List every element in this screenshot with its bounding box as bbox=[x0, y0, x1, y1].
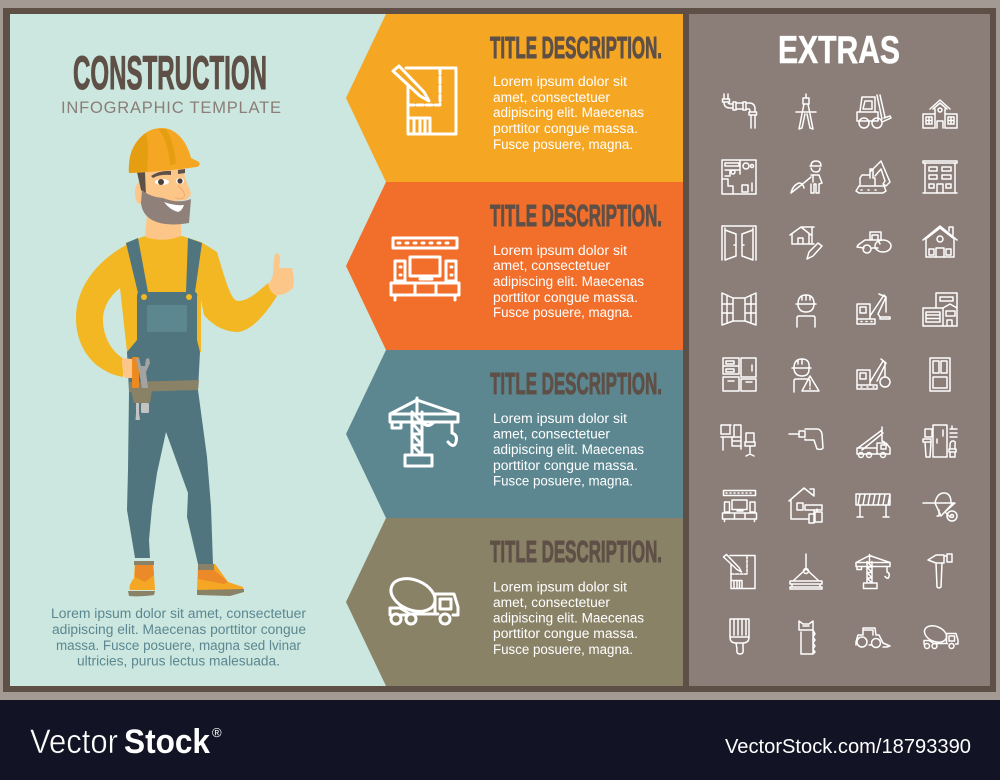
step 4 chevron bbox=[346, 518, 683, 686]
icon: hammer bbox=[928, 554, 952, 588]
icon: kitchen cabinets bbox=[723, 358, 756, 391]
icon: bathroom bbox=[923, 425, 957, 457]
step 1 text: Fusce posuere, magna. bbox=[493, 137, 633, 153]
icon: worker with shovel bbox=[791, 161, 822, 193]
footer logo: Stock bbox=[124, 723, 210, 761]
icon: paint brush bbox=[730, 619, 749, 654]
icon: office desk bbox=[721, 425, 755, 456]
step 3 text: adipiscing elit. Maecenas bbox=[493, 442, 644, 458]
step 3 text: amet, consectetuer bbox=[493, 426, 610, 442]
bib pocket bbox=[147, 305, 187, 332]
hard hat shading bbox=[129, 129, 176, 173]
subtitle: INFOGRAPHIC TEMPLATE bbox=[61, 99, 281, 117]
worker overalls bbox=[126, 238, 213, 564]
eyebrows bbox=[151, 169, 185, 178]
step 2 text: amet, consectetuer bbox=[493, 258, 610, 274]
icon: window bbox=[722, 293, 756, 325]
step 1 chevron bbox=[346, 14, 683, 182]
icon: compass bbox=[796, 94, 816, 129]
icon: door bbox=[930, 358, 950, 391]
thumbs up hand bbox=[268, 253, 294, 295]
icon: double door bbox=[722, 226, 756, 260]
icon: hoisted girder bbox=[790, 554, 822, 589]
step 2 heading: TITLE DESCRIPTION. bbox=[490, 199, 662, 233]
panel: step 4 bbox=[346, 518, 683, 686]
step 4 heading: TITLE DESCRIPTION. bbox=[490, 535, 662, 569]
icon: house with paint roller bbox=[789, 488, 822, 523]
icon: office buildings bbox=[923, 293, 957, 326]
icon: apartment building bbox=[923, 161, 957, 193]
panel: step 1 bbox=[346, 14, 683, 182]
footer logo: ® bbox=[212, 725, 222, 740]
extras heading: EXTRAS bbox=[778, 29, 900, 72]
ear bbox=[135, 182, 145, 204]
icon: tower crane bbox=[856, 554, 890, 588]
panel: step 3 bbox=[346, 350, 683, 518]
step 3 text bbox=[493, 411, 644, 490]
step 1 icon: blueprint and pencil bbox=[393, 66, 456, 134]
step 1 text bbox=[493, 74, 644, 153]
icon: hand saw bbox=[799, 621, 815, 654]
step 3 text: porttitor congue massa. bbox=[493, 458, 638, 474]
bib buttons bbox=[141, 294, 192, 300]
icon: wheelbarrow bbox=[923, 493, 957, 521]
icon: excavator bbox=[856, 161, 890, 193]
face bbox=[143, 168, 191, 204]
tool pouch bbox=[131, 390, 152, 403]
step 4 text: Lorem ipsum dolor sit bbox=[493, 580, 627, 596]
illustration: construction worker bbox=[76, 128, 294, 596]
step 2 text: Fusce posuere, magna. bbox=[493, 305, 633, 321]
footer logo: Vector bbox=[30, 723, 118, 761]
tools bbox=[132, 357, 150, 420]
icon grid: extras bbox=[721, 94, 958, 654]
step 2 text bbox=[493, 243, 644, 321]
icon: road roller bbox=[857, 232, 891, 253]
icon: house bbox=[923, 226, 957, 257]
step 4 text: adipiscing elit. Maecenas bbox=[493, 610, 644, 626]
step 3 text: Fusce posuere, magna. bbox=[493, 474, 633, 490]
step 4 text: amet, consectetuer bbox=[493, 595, 610, 611]
hand at belt bbox=[122, 358, 132, 378]
nose bbox=[175, 186, 184, 199]
step 3 text: Lorem ipsum dolor sit bbox=[493, 411, 627, 427]
left text block: adipiscing elit. Maecenas porttitor congue bbox=[52, 622, 306, 638]
left text block: massa. Fusce posuere, magna sed lvinar bbox=[56, 638, 301, 654]
footer url: VectorStock.com/18793390 bbox=[725, 736, 971, 758]
footer bar bbox=[0, 700, 1000, 780]
step 3 icon: tower crane bbox=[390, 398, 458, 466]
panel: step 2 bbox=[346, 182, 683, 350]
panel: left background bbox=[10, 14, 683, 686]
step 4 text: porttitor congue massa. bbox=[493, 626, 638, 642]
worker neck bbox=[145, 215, 181, 240]
panel: extras background bbox=[689, 14, 990, 686]
icon: worker with warning sign bbox=[792, 359, 819, 392]
icon: road barrier bbox=[856, 494, 890, 517]
icon: tv console bbox=[722, 490, 756, 522]
left text block bbox=[51, 606, 306, 670]
icon: mobile crane bbox=[857, 427, 890, 458]
step 2 chevron bbox=[346, 182, 683, 350]
step 3 chevron bbox=[346, 350, 683, 518]
hard hat bbox=[129, 128, 200, 173]
icon: pipe bbox=[722, 94, 756, 128]
icon: school bbox=[923, 100, 957, 128]
hair bbox=[137, 172, 146, 196]
worker arm left bbox=[76, 243, 140, 377]
icon: house plan with pencil bbox=[790, 227, 822, 259]
left text block: ultricies, purus lectus malesuada. bbox=[77, 654, 280, 670]
title: CONSTRUCTION bbox=[73, 46, 267, 99]
icon: forklift bbox=[857, 95, 891, 128]
footer logo bbox=[30, 723, 222, 761]
step 1 heading: TITLE DESCRIPTION. bbox=[490, 31, 662, 65]
step 4 text bbox=[493, 580, 644, 658]
step 2 icon: tv console bbox=[391, 238, 459, 300]
icon: floor plan bbox=[722, 160, 756, 194]
step 2 text: porttitor congue massa. bbox=[493, 290, 638, 306]
step 2 text: Lorem ipsum dolor sit bbox=[493, 243, 627, 259]
icon: bulldozer bbox=[856, 628, 890, 648]
left boot bbox=[128, 561, 155, 596]
step 1 text: adipiscing elit. Maecenas bbox=[493, 105, 644, 121]
icon: wrecking crane bbox=[857, 359, 890, 389]
worker torso and right arm bbox=[120, 236, 277, 352]
smile bbox=[164, 202, 184, 212]
right boot bbox=[197, 564, 244, 596]
belt bbox=[129, 380, 199, 392]
icon: worker bbox=[796, 295, 816, 327]
step 1 text: Lorem ipsum dolor sit bbox=[493, 74, 627, 90]
step 4 icon: cement mixer bbox=[386, 572, 458, 624]
eyes bbox=[155, 178, 184, 185]
icon: crawler crane bbox=[857, 294, 890, 324]
icon: cement mixer bbox=[922, 623, 958, 648]
step 3 heading: TITLE DESCRIPTION. bbox=[490, 367, 662, 401]
icon: drill bbox=[789, 429, 823, 449]
step 1 text: porttitor congue massa. bbox=[493, 121, 638, 137]
step 2 text: adipiscing elit. Maecenas bbox=[493, 274, 644, 290]
icon: blueprint bbox=[724, 554, 755, 588]
step 4 text: Fusce posuere, magna. bbox=[493, 642, 633, 658]
step 1 text: amet, consectetuer bbox=[493, 90, 610, 106]
beard bbox=[141, 190, 191, 224]
left text block: Lorem ipsum dolor sit amet, consectetuer bbox=[51, 606, 306, 622]
